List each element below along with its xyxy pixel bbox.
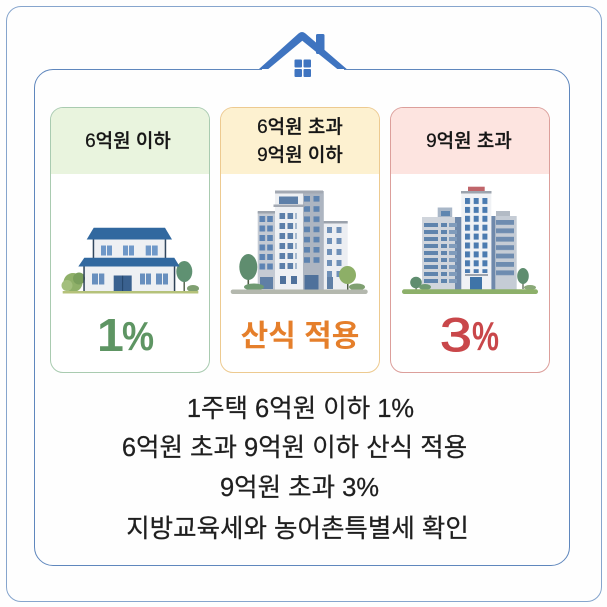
panel: up to 600 million won (50, 107, 210, 373)
panel: 600 to 900 million won (220, 107, 380, 373)
icon: high-rise cluster (402, 186, 538, 294)
summary text block: 6억원 초과 9억원 이하 산식 적용 (122, 434, 467, 462)
inner frame (34, 69, 570, 566)
panel: over 900 million won (390, 107, 550, 373)
heading: 6억원 이하 (51, 108, 209, 174)
heading: 6억원 초과 9억원 이하: 6억원 초과 (257, 116, 343, 138)
value: 3%: 3 (440, 308, 471, 361)
heading: 6억원 초과 9억원 이하 (221, 108, 379, 174)
value: 1%: % (122, 313, 154, 359)
icon: two-storey house (62, 228, 199, 294)
value: 1% (97, 309, 154, 361)
icon: apartment cluster (230, 190, 368, 294)
heading: 9억원 초과 (391, 108, 549, 174)
value: 산식 적용: 산식 적용 (241, 320, 359, 353)
summary text block (122, 395, 469, 543)
value: 3% (440, 308, 499, 361)
heading: 6억원 초과 9억원 이하: 9억원 이하 (257, 144, 343, 166)
heading: 9억원 초과: 9억원 초과 (426, 130, 512, 152)
heading: 6억원 이하: 6억원 이하 (85, 130, 171, 152)
value: 3%: % (472, 313, 499, 359)
summary text block: 지방교육세와 농어촌특별세 확인 (126, 515, 469, 543)
value: 1%: 1 (97, 309, 124, 361)
icon: house roof (259, 32, 347, 77)
summary text block: 9억원 초과 3% (220, 474, 379, 502)
summary text block: 1주택 6억원 이하 1% (187, 395, 414, 423)
